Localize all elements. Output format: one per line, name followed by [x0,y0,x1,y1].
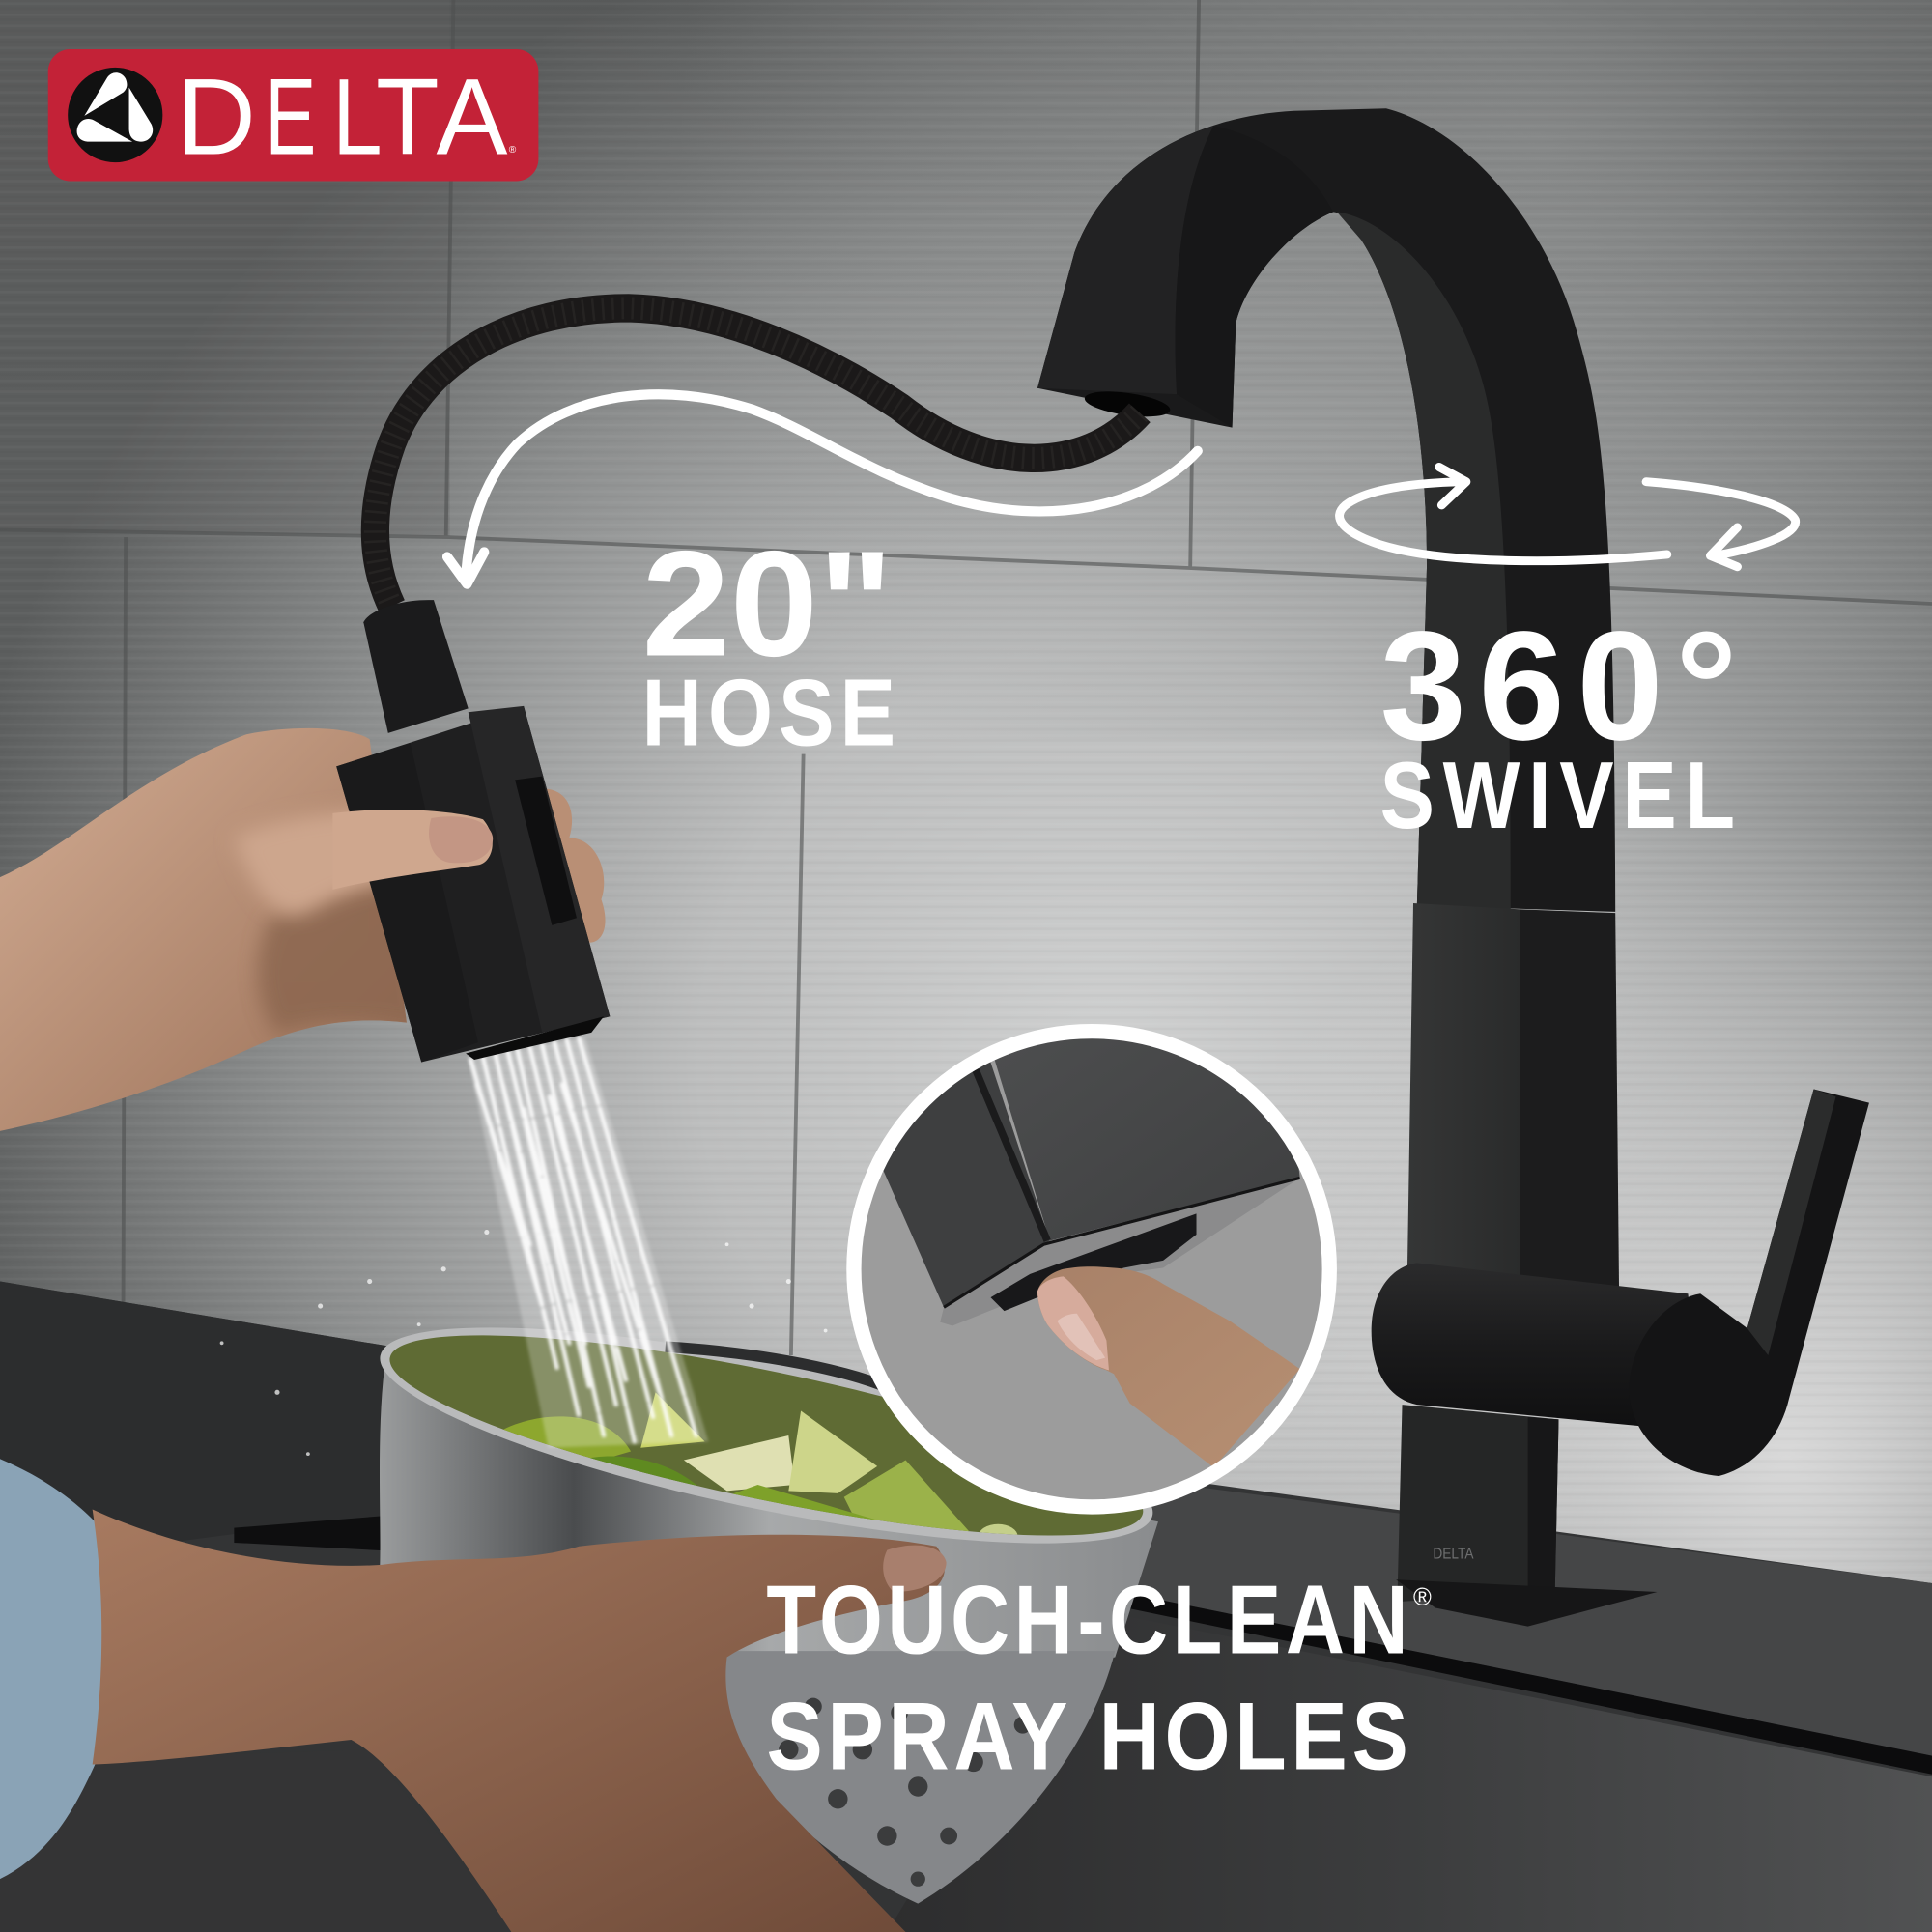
360 swivel label: 360° [1380,600,1737,773]
hand holding bowl [93,1509,947,1932]
wordmark: A [437,55,508,177]
faucet spout [1037,108,1615,912]
hand holding sprayer [0,728,606,1131]
20 inch hose label: 20" [642,520,894,688]
splash droplets [220,1230,828,1456]
thumb [234,810,493,915]
inset finger [1037,1266,1300,1467]
water spray [469,1037,708,1448]
thumb tip over sprayer [332,810,493,890]
touch-clean spray holes label: ® [1413,1584,1432,1611]
Delta logo [48,49,538,181]
20 inch hose label [642,520,895,766]
rim [365,1283,1168,1588]
faucet [1037,108,1869,1627]
sprayer head [336,600,610,1062]
sleeve [0,1459,126,1879]
inset: touch-clean spray holes [854,1010,1329,1507]
Delta logo: ® [509,145,517,156]
touch-clean spray holes label: SPRAY HOLES [766,1682,1408,1790]
faucet base: DELTA [1433,1547,1474,1563]
faucet lower body [1407,903,1619,1288]
faucet base [1396,1405,1658,1627]
hose [375,308,1140,607]
faucet handle hub [1372,1263,1700,1432]
arrow: hose pull-out reach [447,394,1198,584]
palm [0,728,407,1131]
shadow under thumb [251,885,407,1036]
colander bowl [380,1327,1158,1904]
bowl silver body [380,1368,1158,1725]
faucet lever [1629,1090,1869,1476]
wordmark: D [176,55,256,177]
wordmark: L [332,55,383,177]
wordmark: T [376,55,440,177]
arrow: 360 degree swivel [1340,467,1796,567]
panel: countertop and sink [0,1282,1932,1932]
strainer bottom [717,1651,1115,1904]
360 swivel label [1380,600,1737,849]
360 swivel label: SWIVEL [1380,743,1735,849]
wordmark [176,55,508,177]
icon: Delta triangle mark [68,68,162,162]
wordmark: E [265,55,316,177]
fingernail [1037,1276,1109,1370]
touch-clean spray holes label [766,1566,1432,1790]
vegetables inside bowl [389,1335,1144,1536]
touch-clean spray holes label: TOUCH-CLEAN [766,1566,1408,1674]
inset spray head [882,1010,1300,1325]
20 inch hose label: HOSE [642,660,895,766]
fingers behind sprayer [542,788,606,943]
